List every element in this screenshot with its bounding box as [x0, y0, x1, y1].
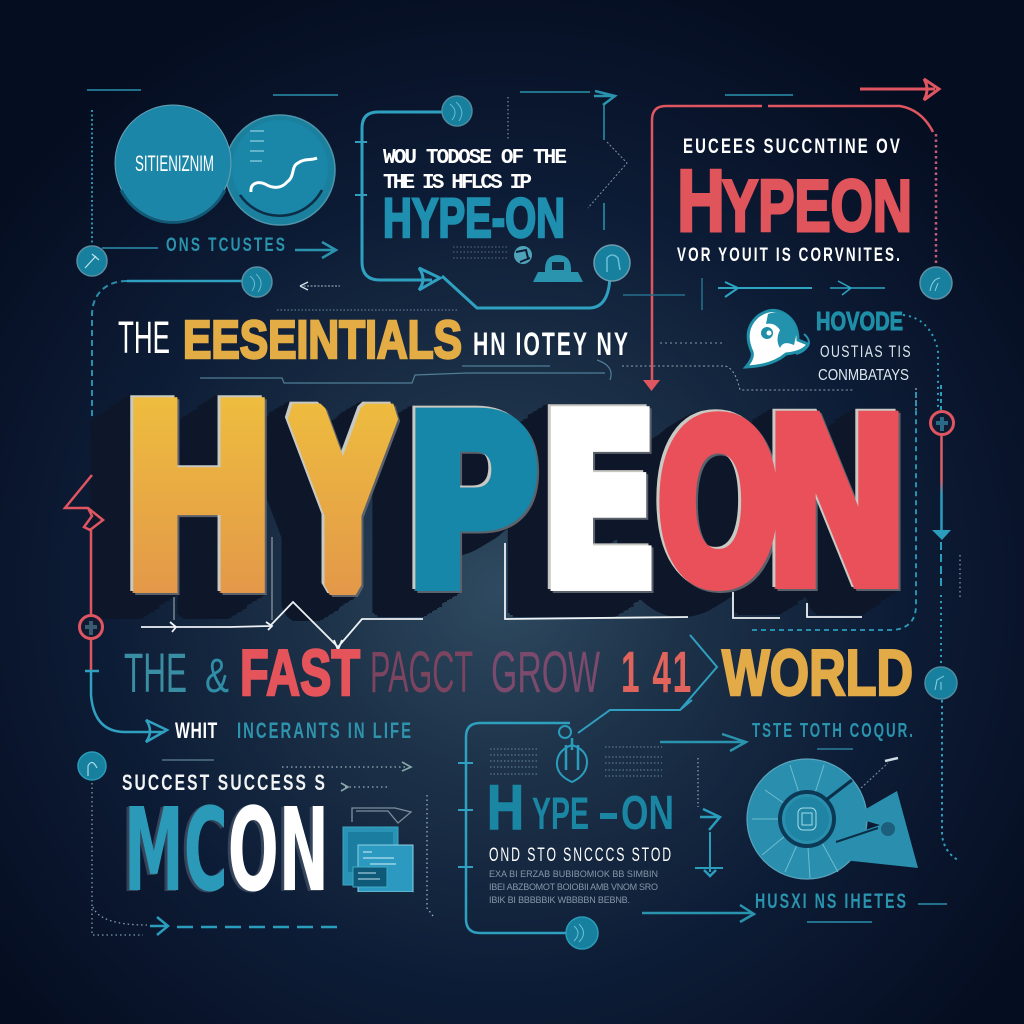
panel: bottom left mcon	[78, 718, 433, 935]
label bottom: HUSXI NS IHETES	[755, 890, 908, 913]
text line two: CONMBATAYS	[818, 367, 909, 384]
heading	[677, 151, 912, 250]
white trend line below title	[141, 537, 862, 650]
heading: H	[487, 773, 524, 843]
top right arrows and lines	[520, 91, 793, 230]
subheading: OND STO SNCCCS STOD	[489, 845, 673, 866]
arrow bottom	[642, 905, 754, 922]
node	[566, 917, 598, 949]
small copy: EXA BI ERZAB BUBIBOMIOK BB SIMBIN	[489, 869, 658, 879]
panel: top left circles	[77, 90, 338, 276]
icon: document windows	[343, 808, 413, 895]
icon: disc	[747, 758, 918, 879]
arrow	[295, 242, 336, 258]
red node	[80, 616, 102, 638]
dotted lines	[453, 247, 507, 258]
node	[920, 267, 952, 299]
label top: TSTE TOTH COQUR.	[752, 720, 915, 742]
node left	[77, 246, 107, 276]
node and dashed frame line	[92, 267, 457, 465]
mcon heading: MCON	[124, 784, 329, 918]
icon: chat bubble	[746, 310, 809, 367]
label teal: INCERANTS IN LIFE	[237, 718, 413, 743]
frame	[355, 112, 610, 308]
text tail: HN IOTEY NY	[473, 326, 630, 362]
grow: GROW	[491, 640, 600, 705]
text line two: THE IS HFLCS IP	[383, 172, 532, 195]
blue curve arrow	[85, 671, 167, 742]
dotted line left	[91, 110, 93, 243]
letter N: N	[764, 371, 910, 637]
text highlight: EESEINTIALS	[183, 310, 462, 370]
node	[78, 752, 106, 780]
letter O: O	[656, 377, 781, 635]
arrows below	[623, 278, 885, 310]
fast: FAST	[240, 636, 360, 709]
numbers: 1 41	[621, 640, 693, 705]
red arrow	[65, 475, 103, 530]
red stem	[90, 528, 92, 670]
text lines: WOU TODOSE OF THE	[383, 147, 567, 170]
side dotted lines	[925, 385, 958, 860]
small copy	[489, 869, 658, 905]
rules	[807, 904, 947, 922]
panel: chat icon block	[746, 306, 912, 384]
letter P: P	[403, 368, 540, 641]
icon: machine	[533, 255, 583, 282]
letter E: E	[539, 365, 660, 641]
heading: H	[677, 151, 725, 250]
left side arrows	[65, 475, 167, 742]
dotted blocks	[490, 747, 662, 776]
main title hypeon	[120, 354, 910, 647]
icon: globe	[514, 246, 532, 264]
text line: OUSTIAS TIS	[820, 342, 912, 361]
paget: PAGCT	[370, 640, 473, 705]
letter H: H	[120, 354, 278, 647]
icon: left circle with label	[115, 105, 231, 222]
text: THE	[118, 312, 170, 363]
letter Y: Y	[292, 368, 394, 641]
heading: ON	[621, 787, 674, 840]
small copy: IBEI ABZBOMOT BOIOBII AMB VNOM SRO	[489, 882, 658, 892]
ampersand: &	[205, 650, 229, 703]
dotted lines	[92, 760, 433, 935]
text bottom: VOR YOUIT IS CORVNITES.	[677, 245, 902, 266]
panel: top centre hype-on box	[355, 96, 630, 308]
top rule lines	[87, 90, 338, 95]
dotted connectors right	[622, 315, 960, 600]
panel: top right hypeon box	[623, 79, 952, 391]
text: THE	[124, 641, 187, 704]
heading: YPE	[532, 788, 589, 839]
panel: bottom centre hype-on	[458, 635, 723, 949]
headline: the essentials	[118, 310, 630, 383]
tagline row	[124, 636, 913, 709]
icon: left circle with label: SITIENIZNIM	[135, 151, 214, 176]
panel: bottom right disc	[642, 720, 947, 922]
heading: HYPE-ON	[383, 186, 565, 249]
connector line	[102, 247, 158, 249]
rule	[817, 748, 853, 750]
small copy: IBIK BI BBBBBIK WBBBBN BEBNB.	[489, 895, 630, 905]
label: HOVODE	[816, 306, 903, 336]
text top: EUCEES SUCCNTINE OV	[683, 135, 902, 158]
dashed frame right	[752, 390, 916, 630]
heading	[487, 773, 674, 843]
node right	[594, 245, 630, 281]
red arrow top	[860, 79, 939, 100]
arrow dashed	[150, 917, 338, 935]
node top	[442, 96, 472, 126]
underline	[200, 360, 611, 383]
world: WORLD	[722, 636, 913, 709]
arrow top	[660, 734, 746, 751]
dotted vertical	[507, 97, 509, 140]
label white: WHIT	[175, 718, 218, 743]
icon: knot shield	[557, 726, 587, 782]
icon: right circle with chart	[225, 115, 335, 225]
red frame and arrow	[643, 106, 936, 391]
arrows	[695, 809, 723, 876]
heading: YPEON	[722, 166, 912, 247]
label: ONS TCUSTES	[166, 235, 287, 256]
success text: SUCCEST SUCCESS S	[122, 770, 327, 795]
frame	[458, 635, 717, 933]
